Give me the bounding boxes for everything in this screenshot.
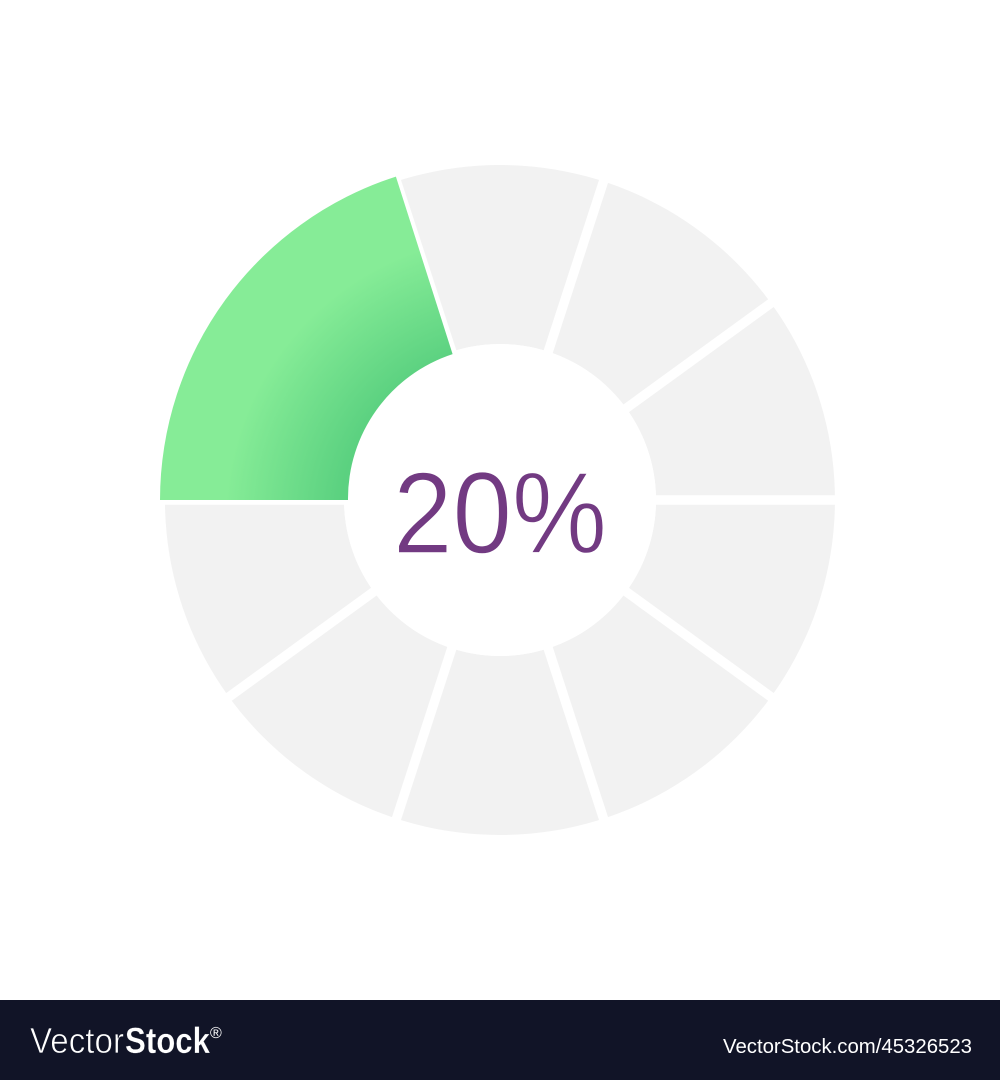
footer bar — [0, 1000, 1000, 1080]
percentage label: 20% — [393, 448, 607, 578]
footer logo — [30, 1020, 211, 1061]
donut chart: 20% progress — [133, 151, 867, 849]
footer logo: Vector — [30, 1020, 124, 1061]
registered mark: ® — [210, 1025, 222, 1042]
grey track segments — [133, 151, 867, 849]
footer url: VectorStock.com/45326523 — [723, 1036, 972, 1058]
green highlighted segment — [160, 177, 453, 500]
footer logo: Stock — [125, 1020, 211, 1061]
center hole — [344, 344, 656, 656]
